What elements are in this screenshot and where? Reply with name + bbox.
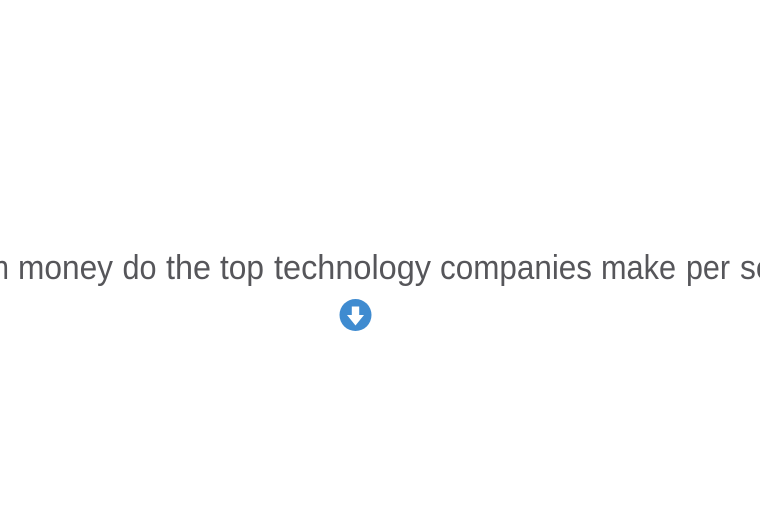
title: clipped headline text: technology [274,249,431,287]
title: clipped headline text: per [686,249,730,287]
title: clipped headline text: do [122,249,156,287]
title: clipped headline text: money [18,249,113,287]
title: clipped headline text: the [166,249,211,287]
icon: blue circle with down arrow [340,299,372,331]
title: clipped headline text: companies [440,249,592,287]
title: clipped headline text [0,249,760,287]
title: clipped headline text: make [601,249,676,287]
title: clipped headline text: top [220,249,264,287]
